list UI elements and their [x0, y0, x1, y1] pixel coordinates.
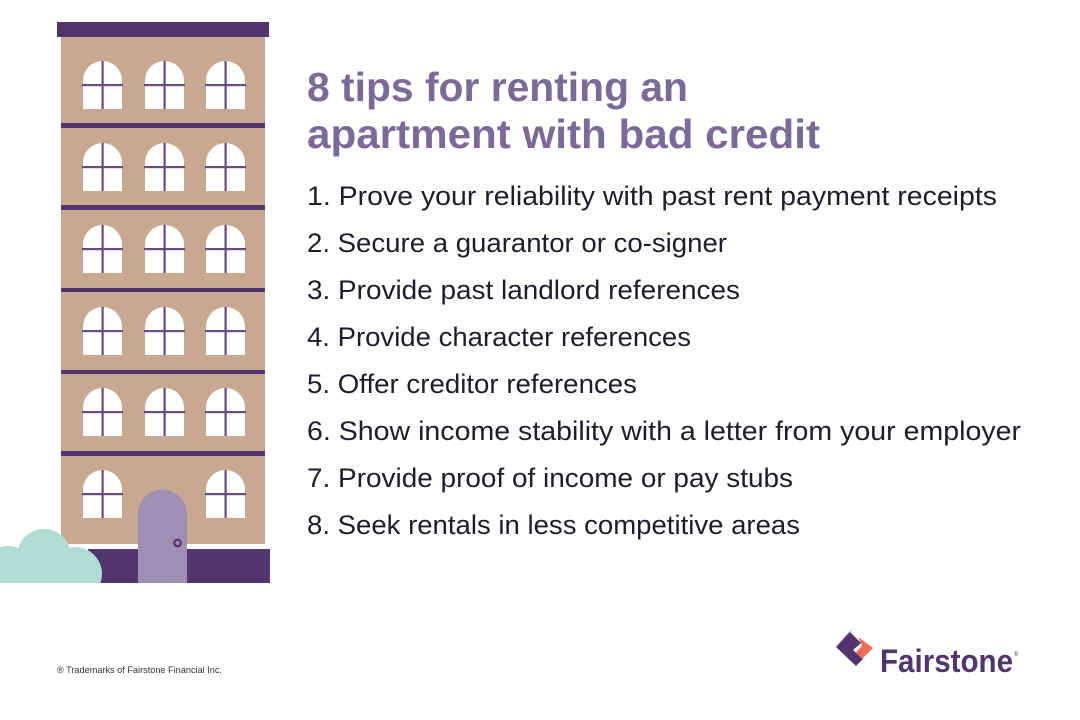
door	[138, 490, 187, 583]
bush	[0, 529, 102, 583]
logo: ®	[1014, 651, 1019, 658]
tips list: 6. Show income stability with a letter from your employer	[307, 416, 1021, 446]
tips list: 7. Provide proof of income or pay stubs	[307, 463, 793, 493]
title: 8 tips for renting an	[307, 64, 688, 110]
tips list: 2. Secure a guarantor or co-signer	[307, 228, 727, 258]
tips list: 4. Provide character references	[307, 322, 691, 352]
tips list: 1. Prove your reliability with past rent payment receipts	[307, 181, 997, 211]
tips list: 3. Provide past landlord references	[307, 275, 740, 305]
tips list	[307, 181, 1021, 540]
tips list: 5. Offer creditor references	[307, 369, 637, 399]
logo: Fairstone	[880, 643, 1013, 679]
title	[307, 64, 820, 157]
footer trademark: ® Trademarks of Fairstone Financial Inc.	[57, 665, 222, 675]
logo	[836, 628, 1019, 679]
title: apartment with bad credit	[307, 111, 820, 157]
tips list: 8. Seek rentals in less competitive areas	[307, 510, 800, 540]
building	[57, 22, 270, 583]
